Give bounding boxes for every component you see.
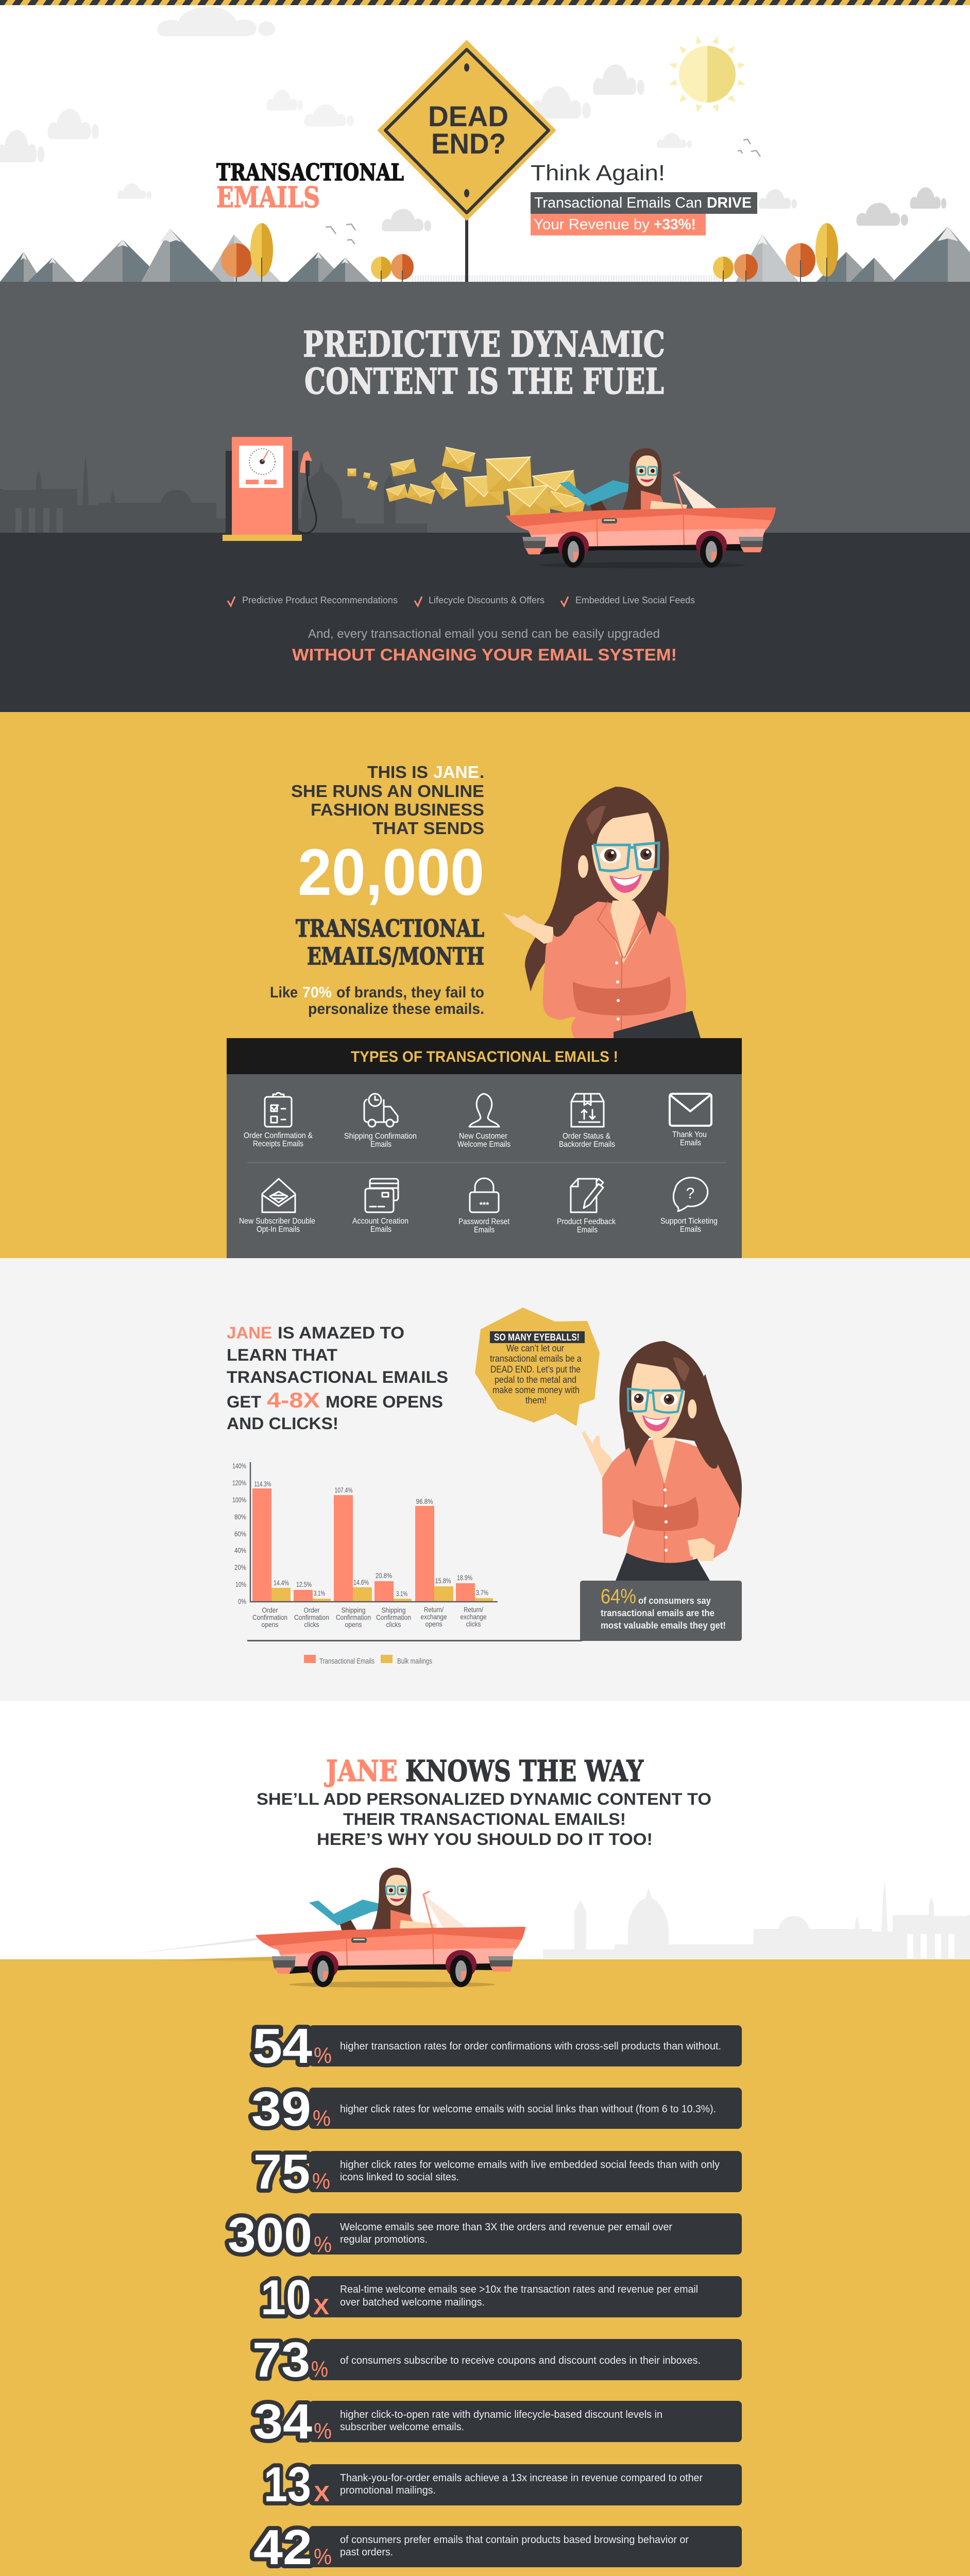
stat: 300% [228,2208,742,2263]
label: new customer: Welcome Emails [457,1140,510,1149]
stat: 300%: % [314,2232,332,2257]
skyline silhouette [543,1880,970,1959]
label: password reset: Emails [474,1226,495,1234]
subheading: personalized dynamic content: SHE’LL ADD PERSONALIZED DYNAMIC CONTENT TO [257,1790,711,1808]
grass [412,275,724,282]
intro text: this is jane [291,762,484,838]
checklist: content types: Predictive Product Recommendations [242,595,398,605]
label: support ticketing: Emails [680,1225,701,1234]
icon: password lock: *** [480,1201,489,1210]
text: without changing your email system: WITHOUT CHANGING YOUR EMAIL SYSTEM! [292,646,677,664]
value labels: 20.8% [376,1571,392,1580]
label: support ticketing: Support Ticketing [660,1217,718,1226]
callout: drive: Transactional Emails Can [534,195,702,211]
y axis labels [232,1462,246,1605]
stat: 10x: Real-time welcome emails see >10x the transaction rates and revenue per email [340,2284,698,2295]
mountains [0,227,970,282]
subheading: personalized dynamic content: HERE’S WHY YOU SHOULD DO IT TOO! [317,1830,653,1849]
callout: 64% of consumers: transactional emails are the [601,1608,714,1618]
callout: so many eyeballs: DEAD END. Let’s put the [490,1364,581,1375]
label: new subscriber [239,1217,315,1234]
intro text: this is jane: SHE RUNS AN ONLINE [291,782,484,801]
callout: so many eyeballs [475,1308,600,1426]
category labels: Shipping [341,1606,366,1614]
icon: sun [668,35,746,113]
stat: 300%: regular promotions. [340,2234,428,2245]
birds [326,139,760,244]
value labels: 107.4% [335,1486,352,1494]
heading: jane is amazed: IS AMAZED TO [278,1324,404,1342]
stat: 13x: X [314,2481,330,2506]
panel: types of transactional emails [227,1038,742,1258]
label: thank you: Thank You [672,1130,707,1139]
stat: 42%: of consumers prefer emails that contain products based browsing behavior or [340,2534,689,2546]
intro text: this is jane: THIS IS [367,762,428,782]
value labels: 14.4% [274,1579,289,1587]
icon: order status [571,1094,604,1127]
stat: 39%: % [313,2106,331,2131]
section background: header sky [0,0,970,282]
y axis labels: 120% [232,1479,246,1487]
heading: jane is amazed: TRANSACTIONAL EMAILS [227,1368,448,1386]
stat: 42%: past orders. [340,2547,393,2558]
stat: 73%: 73 [252,2332,310,2387]
speed lines [133,1938,273,1961]
label: support ticketing [660,1217,718,1234]
stat: 34% [253,2394,742,2449]
stat: 39%: 39 [251,2081,311,2137]
icon: new subscriber [262,1179,295,1212]
label: new subscriber: New Subscriber Double [239,1217,315,1226]
label: order confirmation: Order Confirmation & [244,1131,313,1140]
label: product feedback [557,1217,616,1234]
callout: 64% of consumers [580,1581,742,1641]
callout: 64% of consumers: most valuable emails they get! [601,1620,726,1631]
heading: transactional emails per month: TRANSACTIONAL [296,914,484,942]
value labels: 114.3% [254,1480,271,1488]
icon: support ticketing: ? [686,1185,694,1202]
value labels: 12.5% [296,1580,312,1588]
stat: 10x: X [313,2294,329,2319]
category labels: opens [426,1620,442,1628]
heading: predictive dynamic content is the fuel: CONTENT IS THE FUEL [304,361,664,402]
chart baseline rule [247,1640,582,1641]
stat: 13x: 13 [264,2457,311,2512]
category labels: Confirmation [336,1613,371,1621]
heading: transactional emails: EMAILS [216,180,320,214]
category labels: clicks [304,1620,319,1629]
text: like 70% of brands [270,984,484,1018]
dead end road sign: DEAD [428,100,508,132]
text: every transactional email: And, every transactional email you send can be easily upgraded [308,627,660,641]
panel: jane is amazed [0,1258,970,1701]
intro text: this is jane: THAT SENDS [372,819,484,838]
intro text: this is jane: JANE [433,762,479,782]
label: shipping: Emails [370,1140,392,1149]
y axis labels: 60% [234,1530,246,1538]
stat: 54%: % [314,2043,332,2068]
stat: 42%: 42 [253,2520,312,2575]
label: password reset: Password Reset [458,1217,509,1226]
panel: types of transactional emails: TYPES OF TRANSACTIONAL EMAILS ! [351,1048,618,1065]
callout: so many eyeballs: We can’t let our [506,1343,564,1353]
category labels: Order [262,1606,278,1614]
panel: predictive dynamic content [0,282,970,712]
text: like 70% of brands: 70% [302,984,332,1001]
heading: jane knows the way: JANE [324,1754,398,1788]
dead end road sign [379,41,555,219]
callout: revenue [531,214,706,235]
stat: 39%: higher click rates for welcome emails with social links than without (from 6 to 10.3%). [340,2104,716,2115]
heading: jane is amazed: AND CLICKS! [227,1414,338,1433]
illustration: jane driving car [256,1868,525,1988]
stat: 13x [264,2457,742,2512]
checklist: content types: Embedded Live Social Feeds [575,595,695,605]
value labels: 18.9% [457,1573,472,1582]
value labels: 3.7% [476,1588,488,1597]
icon: product feedback [571,1179,603,1212]
heading: jane is amazed: GET [227,1393,261,1411]
text: like 70% of brands: Like [270,984,298,1001]
value labels: 3.1% [396,1589,407,1598]
stat: 75%: higher click rates for welcome emails with live embedded social feeds than with only [340,2159,720,2171]
stat: 42% [253,2520,742,2575]
subheading: personalized dynamic content: THEIR TRANSACTIONAL EMAILS! [343,1810,626,1828]
stat: 10x [261,2270,742,2325]
icon: new customer [469,1094,499,1127]
value labels: 96.8% [416,1497,433,1505]
label: new customer [457,1132,510,1149]
category labels: Return/ [424,1605,444,1614]
callout: revenue: Your Revenue by [534,216,650,233]
icon: thank you envelope [670,1094,711,1126]
heading: jane knows the way [324,1754,644,1788]
stat: 75%: 75 [253,2144,310,2199]
category labels: clicks [386,1620,401,1629]
heading: transactional emails [216,159,404,214]
label: product feedback: Emails [577,1226,598,1234]
callout: 64% of consumers: 64% [601,1585,636,1608]
chart legend [304,1655,432,1666]
callout: so many eyeballs: pedal to the metal and [495,1375,576,1385]
y axis labels: 10% [235,1580,246,1588]
label: shipping: Shipping Confirmation [344,1132,417,1141]
category labels: Return/ [464,1605,483,1614]
callout: 64% of consumers: of consumers say [638,1596,711,1606]
label: new subscriber: Opt-In Emails [257,1225,300,1234]
callout: drive: DRIVE [707,195,752,211]
heading: jane is amazed: 4-8X [267,1388,320,1412]
heading: jane is amazed: JANE [227,1324,272,1342]
callout: revenue: +33%! [654,216,696,233]
dead end road sign: END? [431,127,506,160]
panel: this is jane [0,712,970,1258]
label: thank you [672,1130,707,1147]
checklist: content types [228,595,695,606]
heading: predictive dynamic content is the fuel [303,324,665,402]
sign pole [465,216,468,282]
icon: order confirmation [265,1093,292,1127]
heading: predictive dynamic content is the fuel: PREDICTIVE DYNAMIC [303,324,665,365]
stat: 75%: % [312,2168,330,2194]
label: order status: Order Status & [563,1132,610,1141]
stat: 13x: Thank-you-for-order emails achieve a 13x increase in revenue compared to other [340,2472,703,2484]
y axis labels: 40% [234,1546,246,1554]
heading: jane is amazed: LEARN THAT [227,1346,337,1364]
bar chart [232,1462,498,1629]
category labels: opens [345,1620,362,1629]
value labels: 14.6% [353,1578,369,1586]
stat: 73% [252,2332,742,2387]
hazard stripe border [0,0,970,5]
label: product feedback: Product Feedback [557,1217,616,1226]
skyline silhouette [0,454,427,533]
category labels: opens [262,1620,278,1629]
category labels: Shipping [381,1606,406,1614]
stat: 34%: 34 [253,2394,312,2449]
stat: 75% [253,2144,742,2199]
clouds [0,7,946,231]
category labels [252,1605,487,1629]
category labels: exchange [420,1613,447,1621]
category labels: exchange [461,1613,487,1621]
y axis labels: 20% [234,1563,246,1571]
label: account creation: Account Creation [352,1217,409,1226]
heading: transactional emails per month [296,914,484,970]
chart legend: Bulk mailings [397,1657,432,1666]
text: think again: Think Again! [531,161,665,185]
category labels: clicks [466,1620,481,1628]
label: password reset [458,1217,509,1234]
label: account creation: Emails [370,1225,392,1234]
stat: 34%: higher click-to-open rate with dynamic lifecycle-based discount levels in [340,2409,662,2420]
category labels: Order [304,1606,320,1614]
text: like 70% of brands: personalize these emails. [308,1001,484,1018]
callout: so many eyeballs: make some money with [492,1385,580,1395]
icon: support ticketing [673,1178,708,1211]
y axis labels: 140% [232,1462,246,1470]
y axis labels: 80% [234,1513,246,1521]
label: order confirmation: Receipts Emails [253,1140,303,1148]
stat: 34%: % [314,2418,332,2444]
stat: 75%: icons linked to social sites. [340,2172,459,2183]
label: new customer: New Customer [459,1132,508,1141]
icon: fuel pump [223,437,316,541]
big number: 20,000: 20,000 [298,836,484,909]
text: like 70% of brands: of brands, they fail to [336,984,484,1001]
checklist: content types: Lifecycle Discounts & Offers [429,595,544,605]
y axis labels: 100% [232,1496,246,1504]
stat: 10x: over batched welcome mailings. [340,2297,485,2308]
panel: statistics [0,1959,970,2576]
illustration: jane driving car [506,448,776,568]
trees [221,223,838,282]
stat: 13x: promotional mailings. [340,2485,436,2496]
category labels: Confirmation [376,1613,411,1621]
heading: jane is amazed [227,1324,448,1433]
stat: 39% [251,2081,742,2137]
icon: flying envelopes [347,447,586,517]
label: account creation [352,1217,409,1234]
value labels: 15.8% [435,1577,451,1585]
stat: 300%: 300 [228,2208,312,2263]
chart legend: Transactional Emails [319,1657,375,1666]
callout: drive [531,192,757,214]
category labels: Confirmation [294,1613,329,1621]
icon: password lock [470,1178,499,1212]
callout: so many eyeballs: SO MANY EYEBALLS! [494,1332,580,1343]
stat: 42%: % [314,2544,332,2569]
label: thank you: Emails [680,1139,701,1147]
value labels: 3.1% [314,1589,325,1597]
heading: transactional emails per month: EMAILS/MONTH [307,942,484,970]
stat: 34%: subscriber welcome emails. [340,2421,464,2433]
callout: so many eyeballs: them! [525,1395,547,1405]
stat: 54%: 54 [252,2019,312,2074]
label: order status: Backorder Emails [559,1140,615,1149]
illustration: jane pointing [582,1341,742,1581]
label: shipping [344,1132,417,1149]
illustration: jane presenting [503,787,701,1038]
intro text: this is jane: FASHION BUSINESS [311,800,484,819]
icon: account creation [365,1179,398,1212]
label: order status [559,1132,615,1149]
subheading: personalized dynamic content [257,1790,711,1849]
heading: jane is amazed: MORE OPENS [326,1393,443,1411]
stat: 54%: higher transaction rates for order confirmations with cross-sell products than without. [340,2041,721,2052]
heading: transactional emails: TRANSACTIONAL [216,159,404,186]
stat: 10x: 10 [261,2270,311,2325]
panel: jane knows the way [0,1701,970,1959]
intro text: this is jane: . [480,762,484,782]
stat: 73%: of consumers subscribe to receive coupons and discount codes in their inboxes. [340,2355,701,2366]
stat: 73%: % [311,2357,328,2382]
stat: 54% [252,2019,742,2074]
category labels: Confirmation [252,1613,287,1621]
value labels [254,1480,488,1598]
heading: jane knows the way: KNOWS THE WAY [405,1754,644,1788]
label: order confirmation [244,1131,313,1148]
callout: so many eyeballs: transactional emails be a [490,1353,582,1364]
stat: 300%: Welcome emails see more than 3X the orders and revenue per email over [340,2222,672,2233]
y axis labels: 0% [238,1597,246,1605]
icon: shipping [364,1094,398,1127]
